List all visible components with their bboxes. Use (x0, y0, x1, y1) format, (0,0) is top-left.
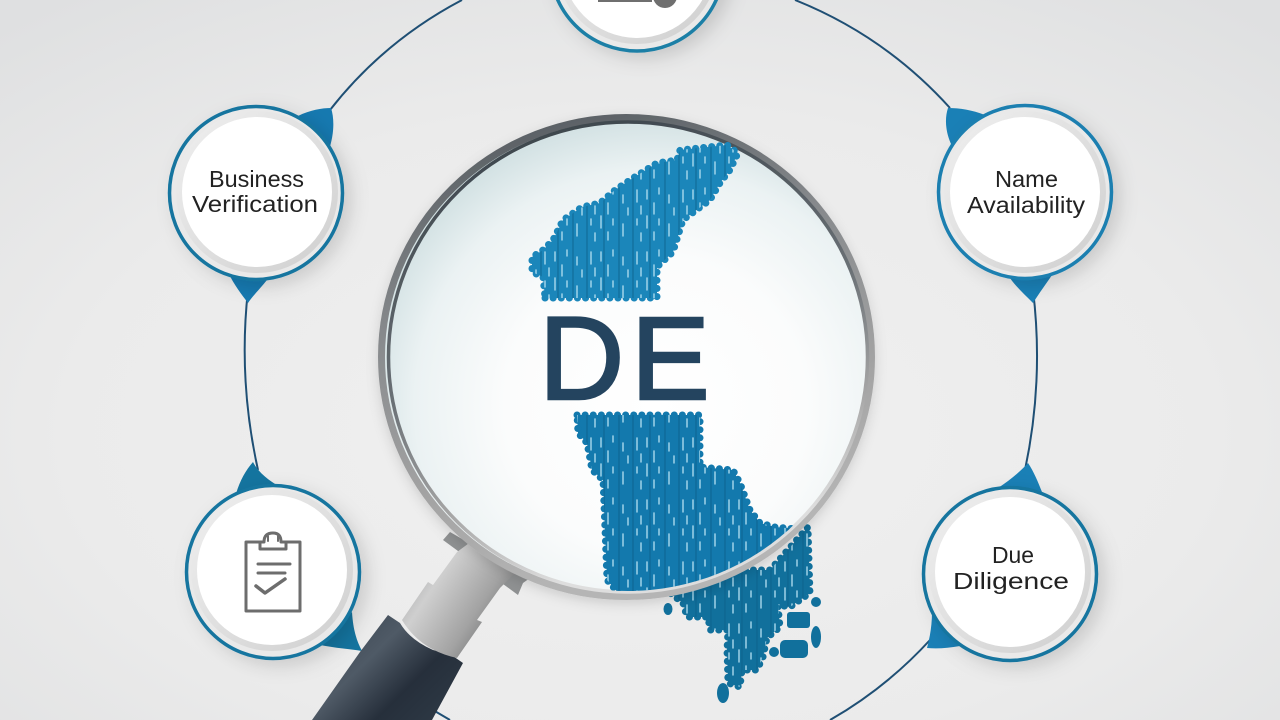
node: Business Verification (170, 106, 342, 303)
label: Availability (967, 192, 1086, 218)
map: upper part inside lens (532, 145, 738, 298)
connecting ring (245, 0, 1037, 720)
heading: DE: E (631, 293, 710, 425)
map: lower part outside lens (640, 527, 821, 703)
label: Business (209, 166, 304, 192)
node: clipboard (186, 462, 362, 658)
handle collar (443, 532, 530, 595)
node: Name Availability (938, 106, 1112, 303)
map: lower part inside lens (574, 412, 793, 591)
label: Due (992, 542, 1034, 568)
magnifying glass (312, 118, 872, 720)
label: Name (995, 166, 1058, 192)
icon: clipboard with checkmark (246, 533, 300, 611)
handle neck (402, 535, 518, 658)
lens (382, 118, 872, 596)
label: Diligence (953, 568, 1069, 594)
handle grip (312, 615, 463, 720)
label: Verification (192, 191, 318, 217)
node: top (cropped) (550, 0, 724, 51)
icon: top node symbol (598, 0, 677, 8)
heading: DE: D (539, 293, 624, 425)
node: Due Diligence (924, 463, 1096, 660)
